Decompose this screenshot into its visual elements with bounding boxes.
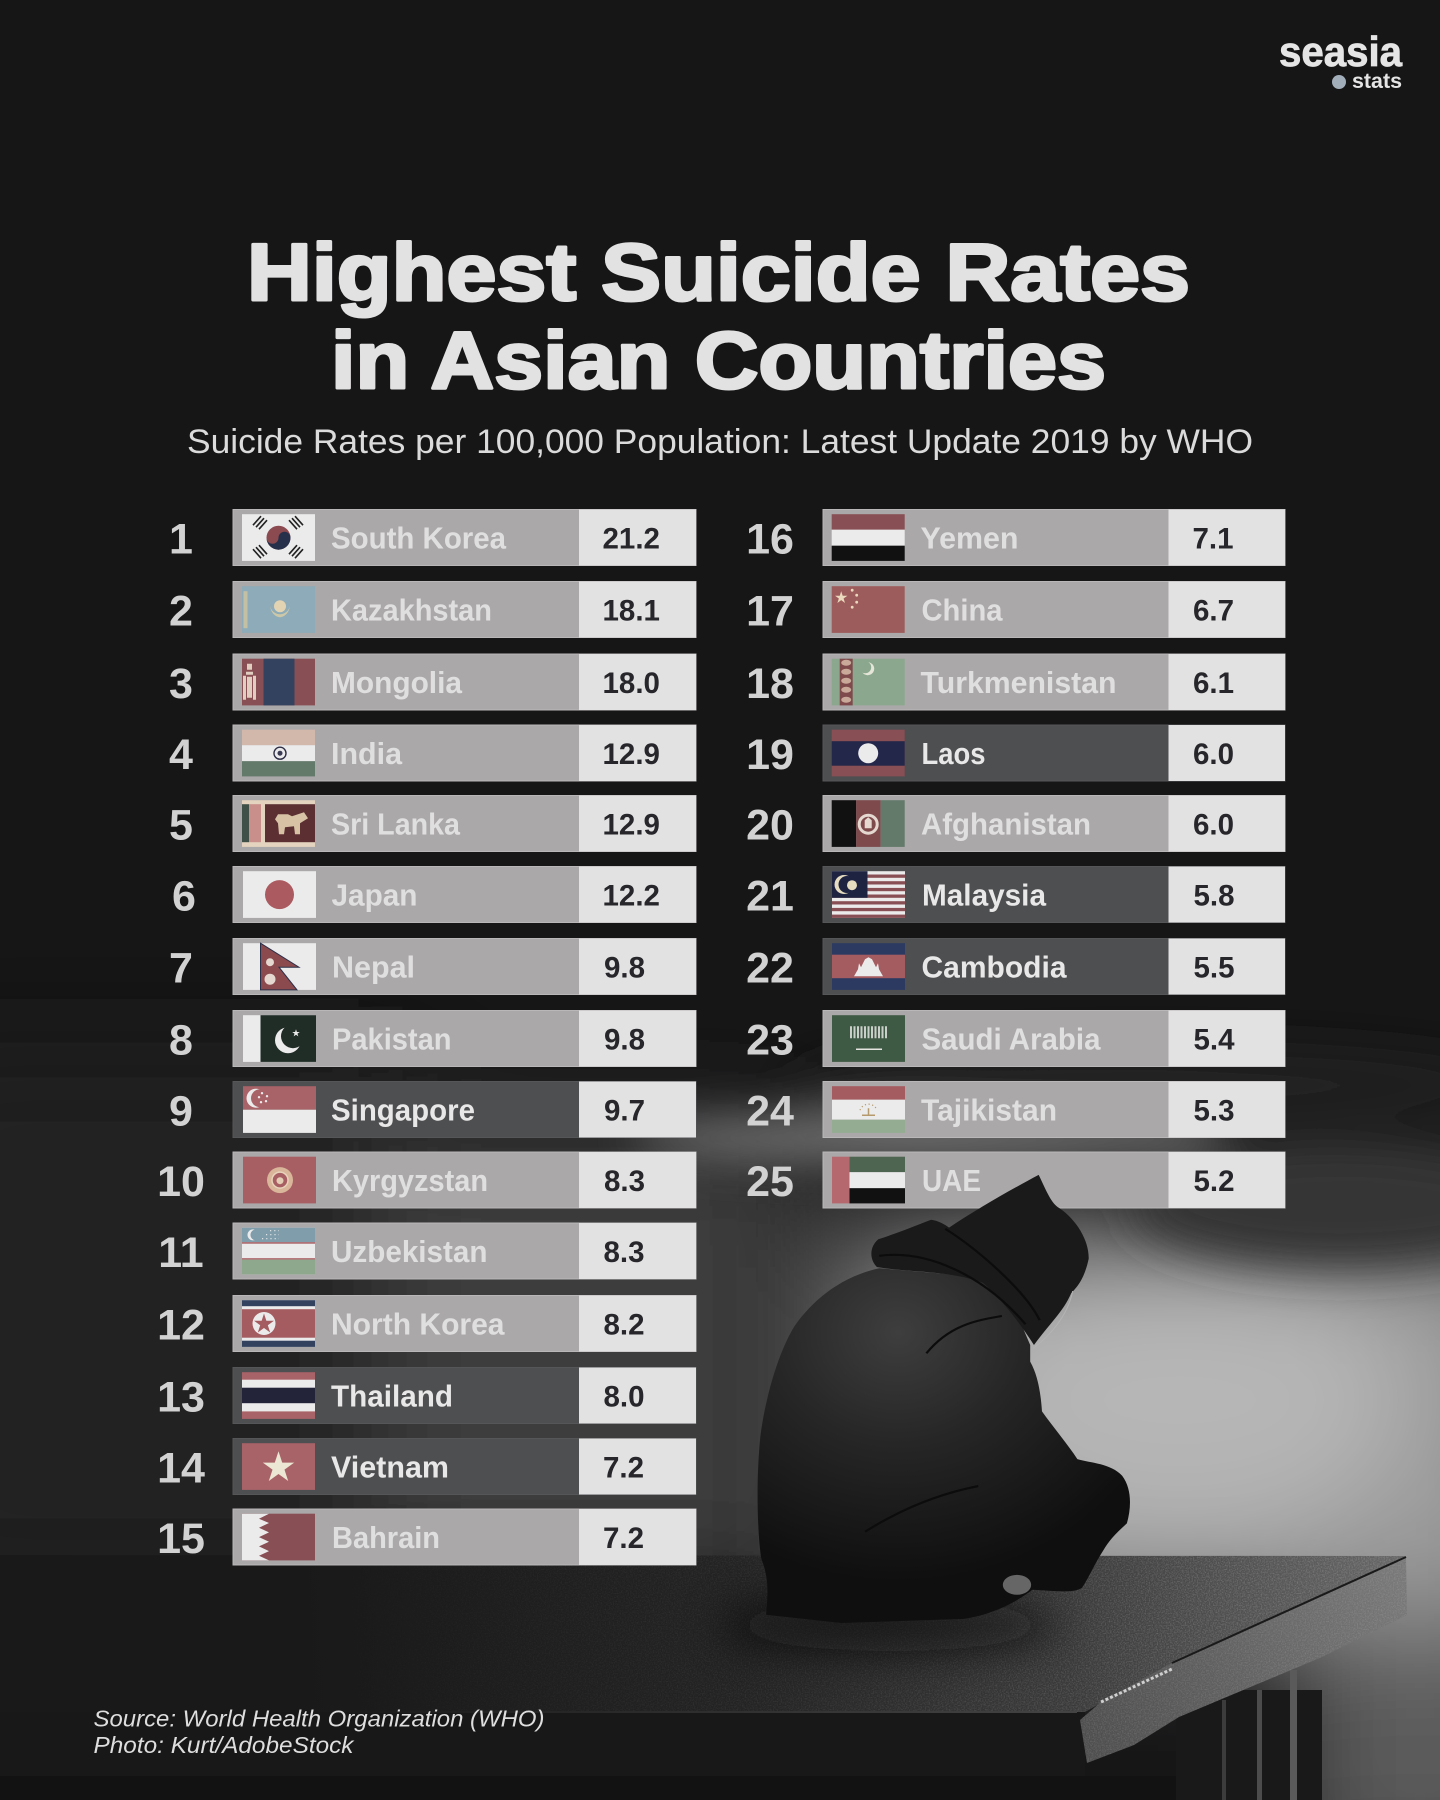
row 18: Turkmenistan: 18 [746,660,794,708]
ledge front face [0,1712,1085,1776]
flag: Kyrgyzstan [243,1157,316,1203]
row 5: Sri Lanka: 12.9 [602,808,660,842]
row 16: Yemen [746,510,1285,566]
row 22: Cambodia: Cambodia [922,950,1067,984]
row 10: Kyrgyzstan [157,1152,696,1208]
row 11: Uzbekistan: 8.3 [604,1236,645,1269]
flag: Thailand [242,1372,315,1419]
row 9: Singapore: 9 [169,1088,193,1136]
row 21: Malaysia: 5.8 [1194,880,1235,912]
flag: UAE [832,1157,905,1203]
row 13: Thailand: 8.0 [604,1380,645,1414]
row 16: Yemen: 16 [746,516,794,564]
earphone cord [1033,1291,1073,1348]
row 19: Laos [746,725,1285,781]
title: Highest Suicide Rates [247,228,1190,318]
flag: Vietnam [242,1443,315,1490]
flag: India [242,730,315,776]
flag: Nepal [243,943,316,990]
logo: seasia stats: seasia [1279,28,1403,75]
row 23: Saudi Arabia: 23 [746,1016,794,1064]
row 16: Yemen: Yemen [920,520,1018,556]
row 3: Mongolia: 18.0 [602,667,660,700]
row 19: Laos: 6.0 [1193,738,1234,771]
row 6: Japan [172,866,696,922]
row 13: Thailand [157,1368,696,1424]
row 13: Thailand: 13 [157,1374,205,1422]
row 7: Nepal: Nepal [332,950,415,984]
row 18: Turkmenistan [746,654,1285,710]
row 17: China: China [922,592,1003,628]
row 14: Vietnam [157,1438,696,1494]
row 20: Afghanistan: Afghanistan [921,806,1091,842]
row 23: Saudi Arabia: 5.4 [1194,1024,1235,1056]
source credit: Photo: Kurt/AdobeStock [94,1732,355,1758]
row 15: Bahrain: 7.2 [603,1522,644,1555]
row 17: China [746,582,1285,638]
flag: Afghanistan [832,800,905,847]
flag: Japan [243,871,316,918]
row 23: Saudi Arabia [746,1010,1285,1066]
flag: South Korea [242,514,315,561]
flag: Bahrain [242,1514,315,1560]
ledge side fascia [1080,1557,1407,1763]
ledge top surface [0,1555,1406,1712]
row 10: Kyrgyzstan: 10 [157,1158,205,1206]
row 22: Cambodia: 5.5 [1194,952,1235,984]
title: in Asian Countries [331,316,1106,406]
row 11: Uzbekistan [158,1223,696,1279]
flag: Yemen [832,514,905,561]
row 6: Japan: 12.2 [602,880,660,912]
flag: Pakistan [243,1015,316,1062]
flag: Saudi Arabia [832,1015,905,1062]
row 11: Uzbekistan: 11 [158,1229,204,1277]
row 2: Kazakhstan: 18.1 [602,594,660,628]
photo: hooded person sitting on ledge [758,1175,1130,1623]
flag: Singapore [243,1086,316,1133]
row 25: UAE: 5.2 [1194,1165,1235,1198]
row 8: Pakistan: 8 [169,1016,193,1064]
row 16: Yemen: 7.1 [1192,522,1234,556]
row 20: Afghanistan: 20 [746,802,794,850]
row 12: North Korea: 12 [157,1302,205,1350]
row 9: Singapore [169,1082,696,1138]
row 1: South Korea: 21.2 [602,522,660,556]
row 9: Singapore: Singapore [331,1092,475,1128]
row 5: Sri Lanka [169,796,696,852]
shoe highlight [1003,1575,1031,1595]
row 8: Pakistan [169,1010,696,1066]
row 6: Japan: Japan [332,878,418,912]
row 21: Malaysia [746,866,1285,922]
flag: Tajikistan [832,1086,905,1133]
row 22: Cambodia [746,938,1285,994]
row 2: Kazakhstan [169,582,696,638]
row 19: Laos: 19 [746,731,794,779]
row 5: Sri Lanka: Sri Lanka [331,806,461,842]
row 1: South Korea [169,510,696,566]
row 4: India: India [331,736,403,771]
row 17: China: 6.7 [1193,594,1234,628]
logo: seasia stats: stats [1352,70,1402,93]
row 11: Uzbekistan: Uzbekistan [331,1234,488,1269]
row 6: Japan: 6 [172,872,196,920]
rooftop ledge [332,1556,1407,1800]
row 24: Tajikistan: 24 [746,1088,794,1136]
person hood [871,1175,1089,1345]
row 25: UAE [746,1152,1285,1208]
column stripes below ledge [1176,1670,1322,1800]
row 18: Turkmenistan: Turkmenistan [920,665,1116,700]
row 3: Mongolia: Mongolia [331,665,463,700]
row 3: Mongolia [169,654,696,710]
row 15: Bahrain [157,1509,696,1565]
row 21: Malaysia: 21 [746,872,794,920]
flag: Sri Lanka [242,800,315,847]
row 25: UAE: UAE [922,1163,981,1198]
flag: China [832,586,905,633]
flag: Laos [832,730,905,776]
row 7: Nepal [169,938,696,994]
row 2: Kazakhstan: Kazakhstan [331,592,492,628]
flag: Cambodia [832,943,905,990]
row 15: Bahrain: 15 [157,1515,205,1563]
source credit: Source: World Health Organization (WHO) [94,1706,544,1732]
row 7: Nepal: 7 [169,944,193,992]
person shadow on ledge [720,1599,1060,1651]
row 4: India [169,725,696,781]
row 23: Saudi Arabia: Saudi Arabia [922,1022,1101,1056]
row 12: North Korea: 8.2 [604,1308,645,1342]
row 14: Vietnam: 14 [157,1444,205,1492]
row 4: India: 4 [169,731,193,779]
row 21: Malaysia: Malaysia [922,878,1047,912]
hood and sleeve folds [865,1229,1040,1532]
row 9: Singapore: 9.7 [604,1094,645,1128]
row 15: Bahrain: Bahrain [332,1520,440,1555]
row 17: China: 17 [746,588,794,636]
row 14: Vietnam: Vietnam [331,1450,449,1484]
row 20: Afghanistan [746,796,1285,852]
flag: Kazakhstan [242,586,315,633]
row 12: North Korea [157,1296,696,1352]
row 12: North Korea: North Korea [331,1306,505,1342]
row 13: Thailand: Thailand [331,1378,453,1414]
row 8: Pakistan: Pakistan [332,1022,452,1056]
row 1: South Korea: South Korea [331,520,507,556]
row 19: Laos: Laos [922,736,986,771]
row 1: South Korea: 1 [169,516,193,564]
row 24: Tajikistan [746,1082,1285,1138]
row 22: Cambodia: 22 [746,944,794,992]
row 2: Kazakhstan: 2 [169,588,193,636]
source credit [94,1706,544,1758]
row 7: Nepal: 9.8 [604,952,645,984]
flag: North Korea [242,1300,315,1347]
row 24: Tajikistan: Tajikistan [921,1092,1057,1128]
flag: Uzbekistan [242,1228,315,1274]
subtitle: Suicide Rates per 100,000 Population: Latest Update 2019 by WHO [187,423,1253,461]
row 18: Turkmenistan: 6.1 [1193,667,1234,700]
row 5: Sri Lanka: 5 [169,802,193,850]
row 14: Vietnam: 7.2 [603,1452,644,1484]
person body [758,1268,1130,1623]
title [247,228,1190,406]
flag: Turkmenistan [832,659,905,705]
row 25: UAE: 25 [746,1158,794,1206]
flag: Malaysia [832,871,905,918]
row 20: Afghanistan: 6.0 [1193,808,1234,842]
row 10: Kyrgyzstan: Kyrgyzstan [332,1163,488,1198]
row 8: Pakistan: 9.8 [604,1024,645,1056]
row 24: Tajikistan: 5.3 [1194,1094,1235,1128]
row 10: Kyrgyzstan: 8.3 [604,1165,645,1198]
row 4: India: 12.9 [602,738,660,771]
flag: Mongolia [242,659,315,705]
row 3: Mongolia: 3 [169,660,193,708]
